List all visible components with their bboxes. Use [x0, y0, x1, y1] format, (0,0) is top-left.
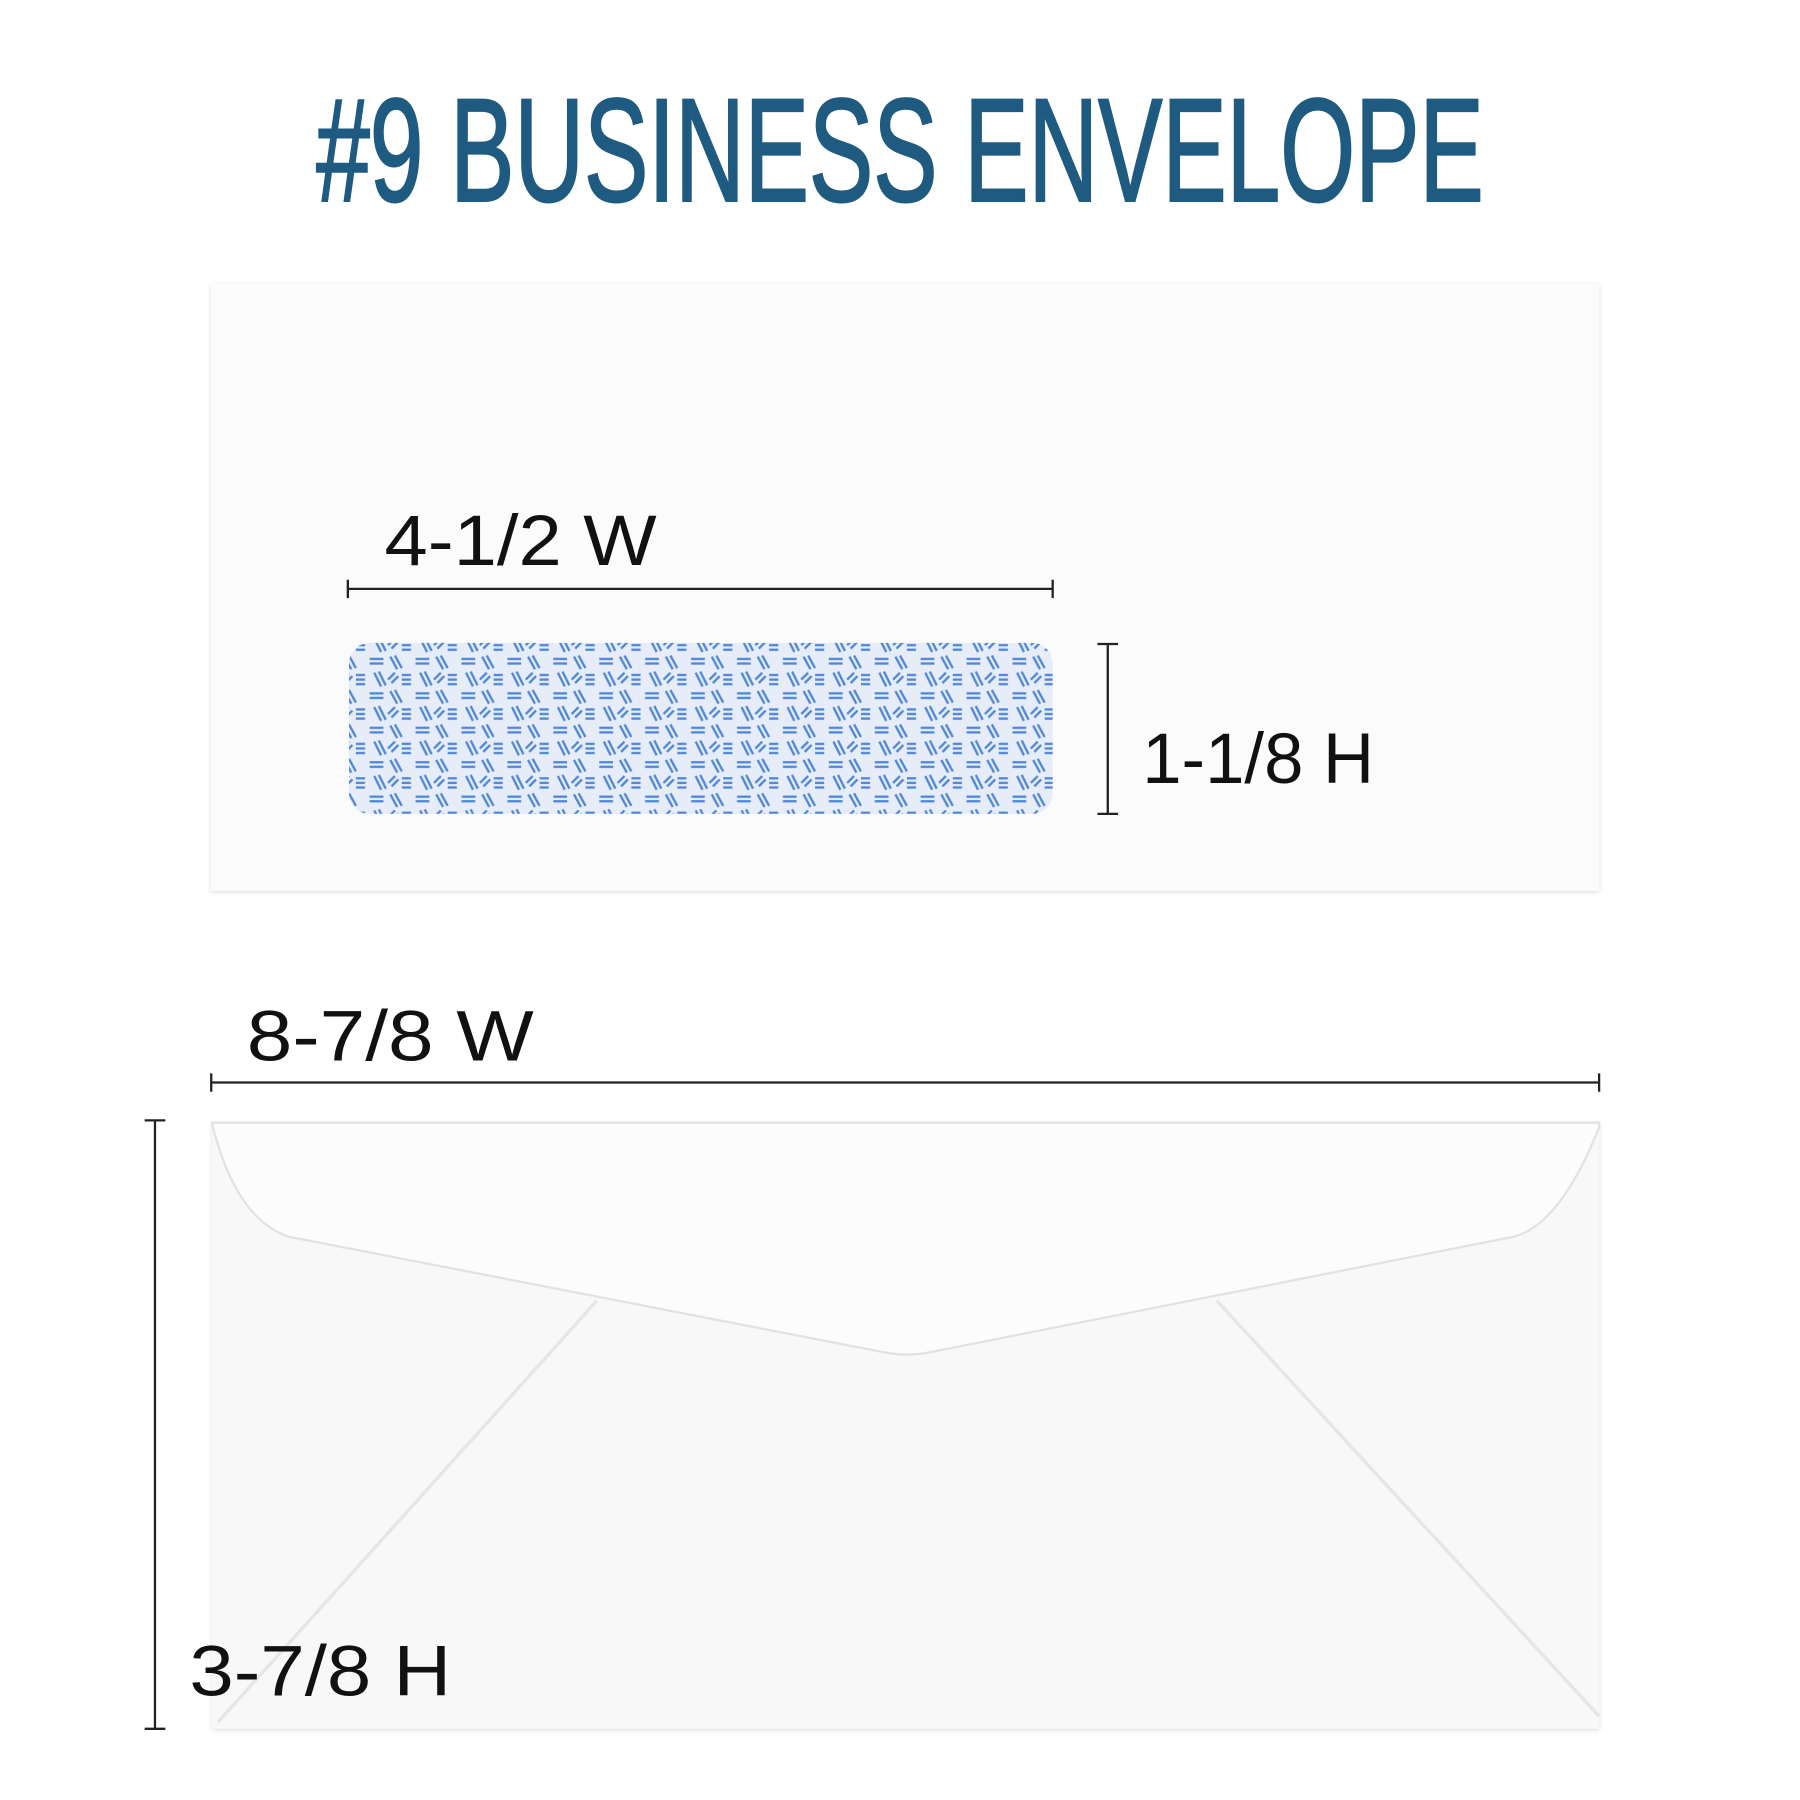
- label: envelope height: 3-7/8 H: [189, 1633, 451, 1712]
- flap: [212, 1123, 1599, 1355]
- label: envelope width: 8-7/8 W: [247, 998, 534, 1077]
- label: window width: 4-1/2 W: [385, 502, 657, 581]
- panel: back envelope: [212, 1123, 1599, 1729]
- panel: front envelope: [211, 284, 1599, 891]
- window: [349, 643, 1053, 814]
- label: window height: 1-1/8 H: [1142, 720, 1374, 799]
